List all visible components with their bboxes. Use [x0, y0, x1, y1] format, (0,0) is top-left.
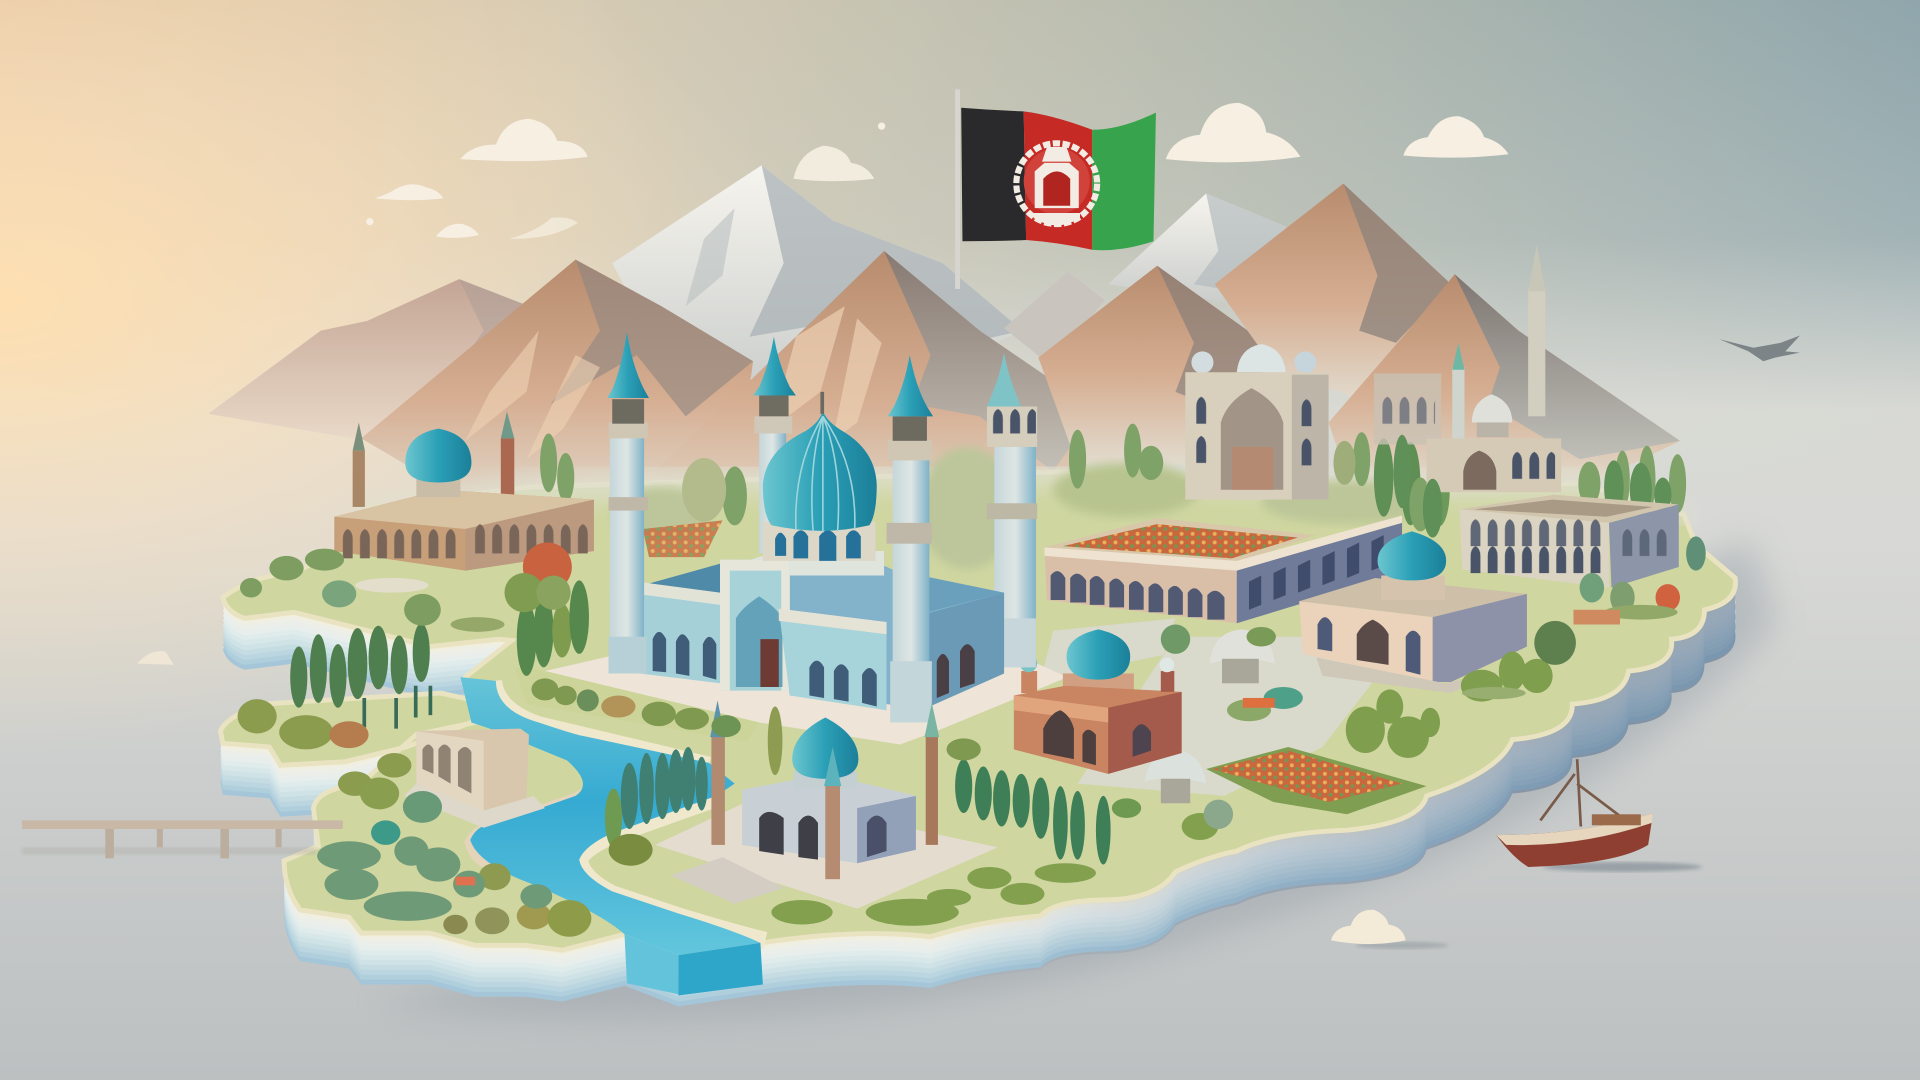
small pavilion on left island	[404, 729, 545, 828]
mountains: snowy back peaks	[612, 165, 1286, 404]
flag red stripe	[1024, 111, 1092, 250]
island shadow on sea	[367, 539, 1776, 1018]
lower mosque steps	[671, 857, 784, 904]
bushes: lower centre	[609, 798, 1233, 926]
island top surface	[220, 471, 1735, 955]
flagpole	[955, 89, 960, 289]
bushes: upper-left lobe	[240, 549, 504, 632]
rear body and roof	[779, 566, 1004, 708]
garden: cypress rows centre-right	[955, 759, 1111, 864]
central portal	[720, 560, 790, 691]
bushes: hedge by central plaza	[531, 678, 981, 760]
trees between back buildings	[1333, 435, 1671, 538]
flower garden patch behind mosque	[643, 520, 722, 557]
haze where mountains meet land	[355, 471, 1684, 520]
building: right arcaded palace	[1460, 495, 1679, 588]
bushes: right side garden	[1161, 573, 1680, 758]
mountains: pink far-left range	[208, 279, 576, 441]
main dome	[763, 411, 877, 533]
river bank left	[470, 767, 591, 864]
flag of Afghanistan on pole	[955, 89, 1156, 289]
bushes: bottom-left lobe	[317, 778, 591, 937]
back-right minaret	[987, 353, 1037, 667]
building: upper gateway	[1185, 344, 1329, 500]
mountains: tan central ranges	[361, 184, 1680, 527]
white dome pavilions	[1145, 629, 1275, 803]
flag black stripe	[961, 108, 1026, 241]
front-right minaret	[887, 355, 933, 722]
plaza: central mosque base	[545, 631, 1068, 744]
right side wing	[927, 593, 1004, 708]
back-left minaret	[753, 337, 796, 553]
background trees and foliage behind buildings	[540, 424, 1706, 571]
small rock on sea left	[137, 651, 174, 665]
river water	[460, 677, 760, 955]
green strip along plaza hedge	[514, 667, 759, 742]
building: upper-left palace with dome	[334, 411, 594, 571]
building: lower blue-domed mosque	[710, 700, 939, 879]
building: small red-brick mosque	[1014, 629, 1182, 774]
garden: cypress trees by central plaza	[504, 542, 589, 676]
boat shadow	[1543, 862, 1702, 872]
cypress row by river	[605, 747, 708, 847]
building: far-right mosque with tall minaret	[1374, 245, 1561, 492]
island base: blue side walls	[220, 594, 1736, 1006]
bushes: left middle lobe	[238, 699, 411, 796]
plane	[1719, 336, 1800, 361]
cloud over sea bottom	[1331, 910, 1449, 949]
building: long flower-roof pavilion	[1044, 516, 1402, 623]
boat mast and sail rigging	[1540, 759, 1622, 827]
building: central blue mosque	[607, 332, 1037, 722]
river bank upper sand	[493, 681, 709, 765]
boat hull	[1496, 813, 1653, 867]
front-left minaret	[607, 332, 649, 673]
boat	[1496, 759, 1702, 872]
garden: flower field	[1206, 747, 1427, 814]
garden: cypress trees on left lobe	[290, 623, 432, 729]
bridge on left	[22, 820, 343, 858]
river front waterfall wall	[624, 934, 678, 994]
building: right lower mosque with teal dome	[1299, 531, 1527, 693]
clouds in sky	[366, 103, 1509, 239]
lower mosque plaza	[655, 796, 998, 909]
river	[460, 677, 765, 996]
flag green stripe	[1092, 113, 1156, 250]
flag emblem	[1016, 143, 1097, 225]
left wing wall	[610, 578, 720, 683]
river bank lower right sand	[579, 798, 765, 940]
right wing wall	[779, 610, 887, 710]
main dome drum	[763, 522, 876, 561]
